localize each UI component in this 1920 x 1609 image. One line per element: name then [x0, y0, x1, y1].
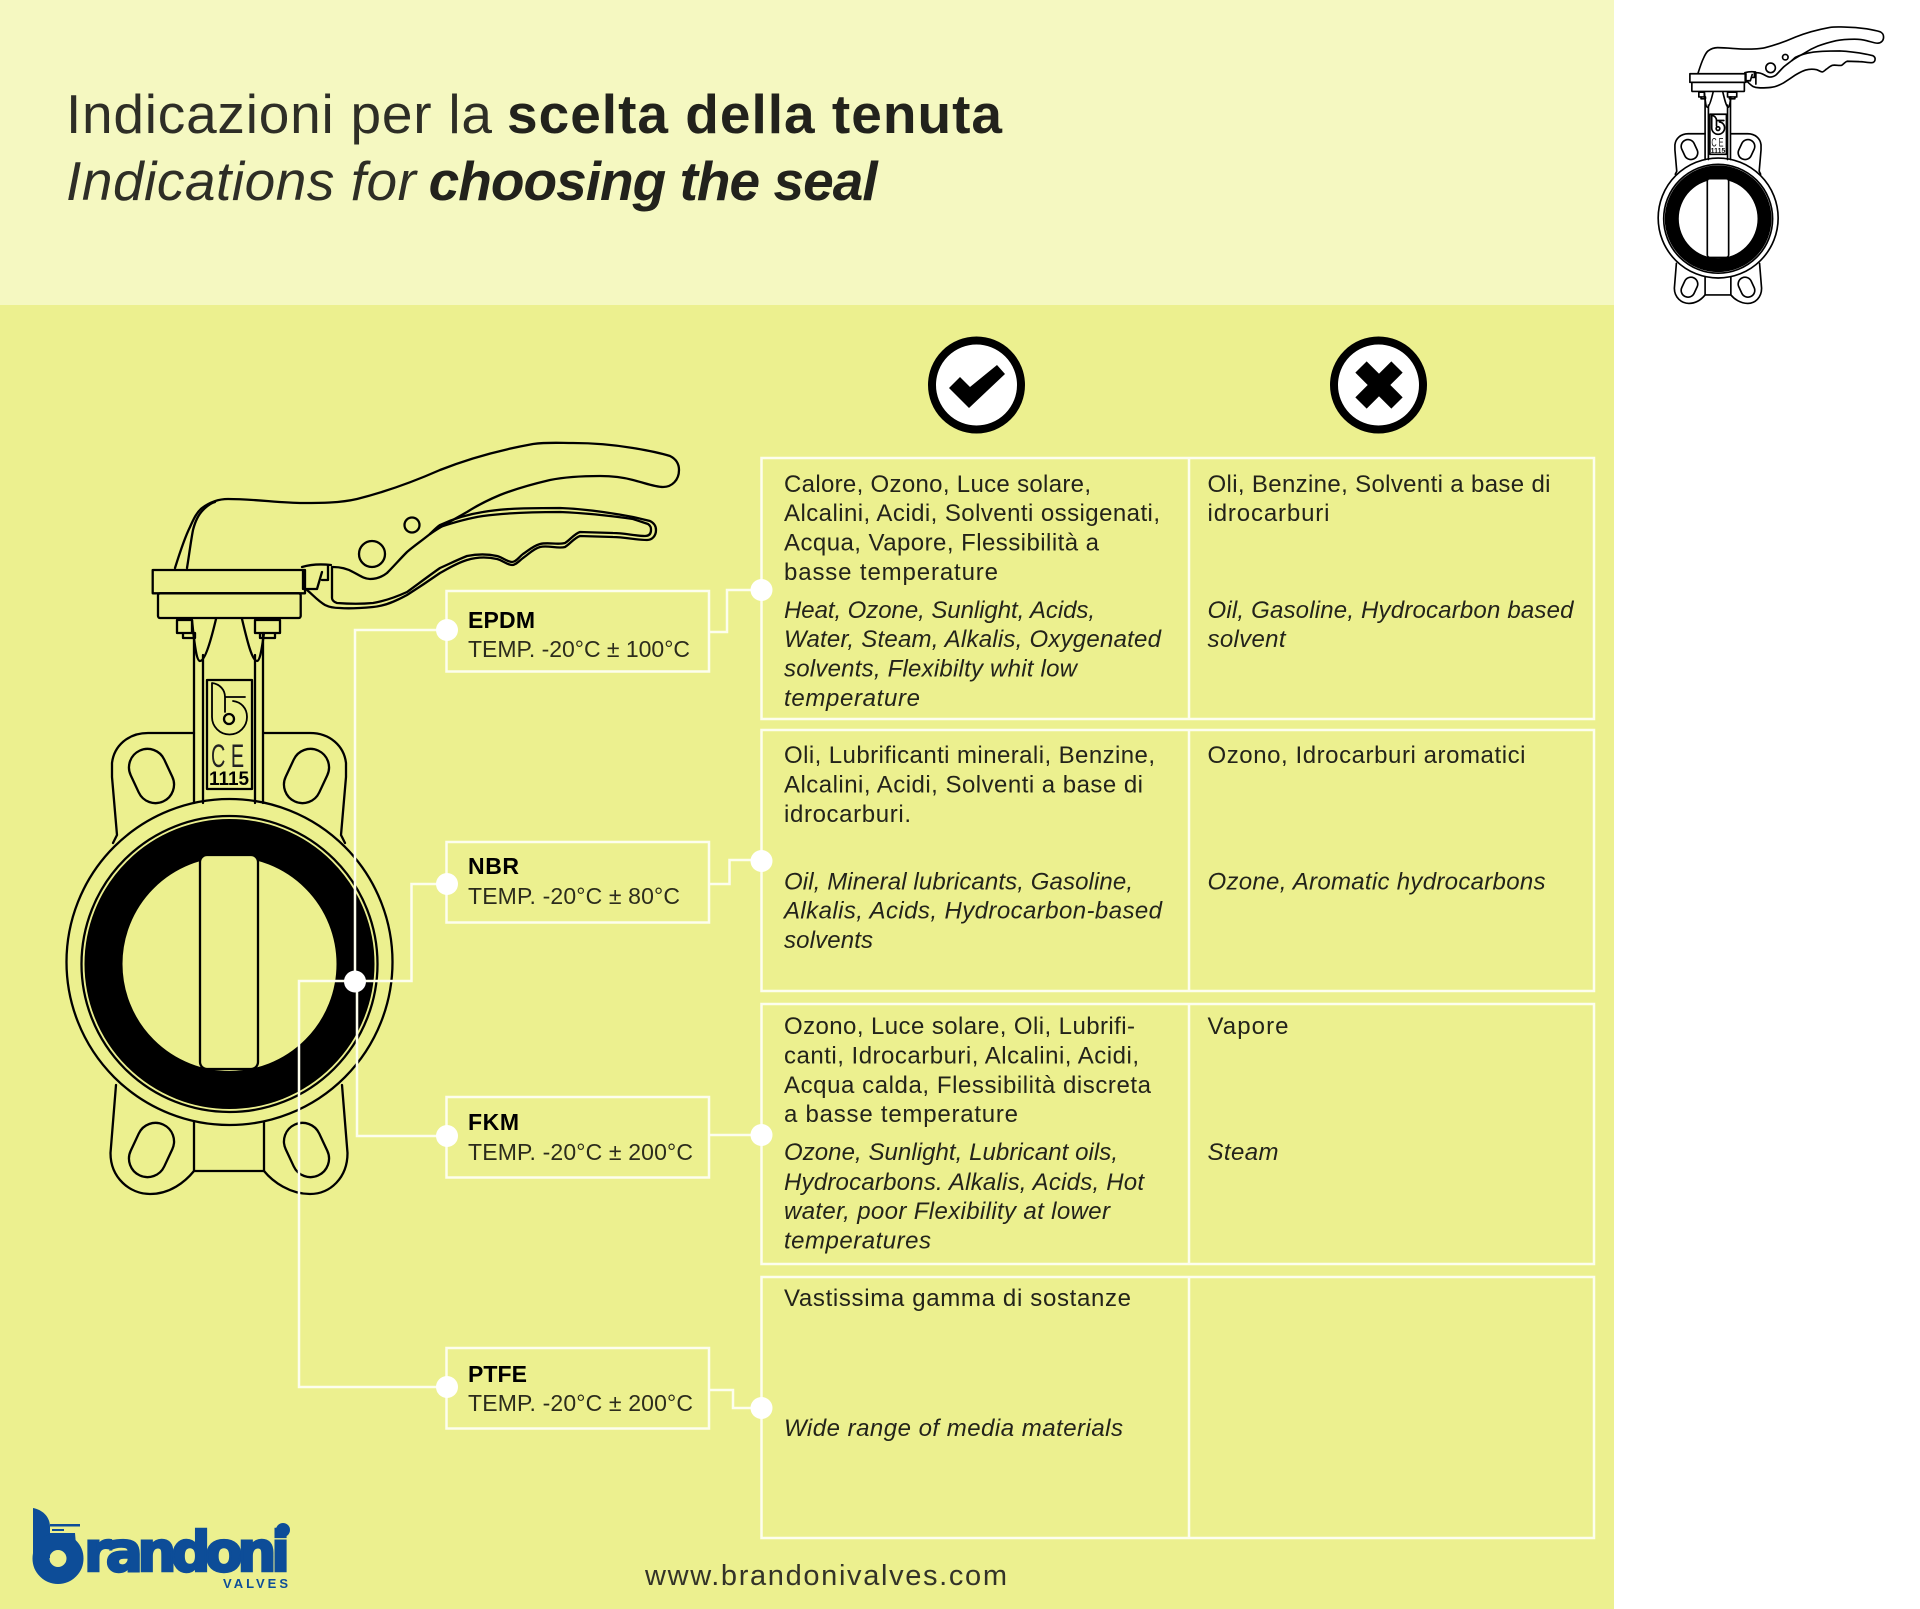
table row: EPDM: solvent: [1208, 626, 1287, 653]
logo: brandoni valves: [33, 1508, 290, 1591]
table row: NBR: Alcalini, Acidi, Solventi a base di: [784, 772, 1143, 798]
connector lines: material labels to table: [709, 590, 761, 1408]
table row: NBR: idrocarburi.: [784, 801, 911, 828]
table row: EPDM: solvents, Flexibilty whit low: [784, 656, 1079, 682]
table row: FKM: Ozono, Luce solare, Oli, Lubrifi-: [784, 1013, 1135, 1040]
title: Indicazioni per la: [66, 83, 492, 145]
label: NBR: NBR: [468, 853, 519, 879]
table row: FKM: water, poor Flexibility at lower: [784, 1198, 1111, 1225]
main background panel: [0, 305, 1614, 1609]
table row: FKM: Acqua calda, Flessibilità discreta: [784, 1072, 1152, 1099]
label: PTFE: PTFE: [468, 1361, 527, 1387]
table row: FKM: temperatures: [784, 1228, 931, 1254]
label: EPDM: TEMP. -20°C ± 100°C: [468, 636, 690, 662]
table row: EPDM: [750, 458, 1594, 719]
label: PTFE: [436, 1348, 709, 1428]
table row: NBR: solvents: [784, 927, 873, 954]
table row: FKM: a basse temperature: [784, 1101, 1018, 1128]
table row: EPDM: Heat, Ozone, Sunlight, Acids,: [784, 597, 1095, 624]
table row: EPDM: basse temperature: [784, 559, 998, 586]
large valve drawing: [66, 443, 679, 1194]
lower lugs: [110, 1085, 348, 1194]
upper lugs: [112, 733, 346, 843]
title: Indications for: [66, 150, 419, 212]
label: EPDM: [436, 591, 709, 672]
table row: EPDM: Calore, Ozono, Luce solare,: [784, 471, 1091, 498]
thumbnail valve drawing: CE: [1711, 137, 1724, 150]
table row: NBR: Ozono, Idrocarburi aromatici: [1208, 742, 1526, 769]
large valve drawing: 1115: [209, 769, 249, 790]
table row: NBR: Oli, Lubrificanti minerali, Benzine,: [784, 742, 1155, 769]
label: FKM: [436, 1097, 709, 1178]
connector lines: valve to material labels: [299, 630, 447, 1387]
icon: cross mark: [1334, 340, 1423, 430]
table row: FKM: canti, Idrocarburi, Alcalini, Acidi,: [784, 1042, 1139, 1070]
label: EPDM: EPDM: [468, 607, 535, 633]
table row: NBR: Oil, Mineral lubricants, Gasoline,: [784, 868, 1133, 896]
table row: FKM: Hydrocarbons. Alkalis, Acids, Hot: [784, 1169, 1145, 1196]
logo: brandoni valves: VALVES: [223, 1576, 288, 1591]
label: FKM: FKM: [468, 1109, 519, 1135]
table row: FKM: Vapore: [1208, 1013, 1288, 1040]
label: FKM: TEMP. -20°C ± 200°C: [468, 1139, 693, 1165]
thumbnail valve drawing: 1115: [1711, 148, 1725, 155]
large valve drawing: CE: [211, 738, 244, 774]
table row: EPDM: temperature: [784, 685, 920, 712]
table row: EPDM: Water, Steam, Alkalis, Oxygenated: [784, 626, 1162, 653]
header band: [0, 0, 1614, 305]
label: NBR: TEMP. -20°C ± 80°C: [468, 883, 680, 909]
table row: NBR: Ozone, Aromatic hydrocarbons: [1208, 868, 1546, 896]
thumbnail valve drawing: [1658, 27, 1884, 303]
table row: PTFE: [750, 1277, 1594, 1538]
logo: brandoni valves: randoni: [84, 1520, 290, 1584]
table row: PTFE: Wide range of media materials: [784, 1415, 1123, 1442]
icon: check mark: [932, 340, 1021, 430]
table row: FKM: Steam: [1208, 1139, 1278, 1166]
table row: EPDM: idrocarburi: [1208, 500, 1330, 527]
title: choosing the seal: [429, 150, 879, 212]
table row: FKM: [750, 1004, 1594, 1264]
table row: EPDM: Oli, Benzine, Solventi a base di: [1208, 471, 1550, 498]
table row: NBR: [750, 730, 1594, 991]
title: [66, 83, 1002, 212]
table row: EPDM: Oil, Gasoline, Hydrocarbon based: [1208, 597, 1574, 624]
title: scelta della tenuta: [507, 83, 1002, 145]
website url: www.brandonivalves.com: [644, 1560, 1007, 1592]
table row: NBR: Alkalis, Acids, Hydrocarbon-based: [782, 898, 1163, 924]
label: NBR: [436, 842, 709, 922]
label: PTFE: TEMP. -20°C ± 200°C: [468, 1390, 693, 1416]
table row: EPDM: Alcalini, Acidi, Solventi ossigenati,: [784, 500, 1160, 527]
table row: EPDM: Acqua, Vapore, Flessibilità a: [784, 530, 1100, 556]
table row: FKM: Ozone, Sunlight, Lubricant oils,: [784, 1139, 1118, 1166]
table row: PTFE: Vastissima gamma di sostanze: [784, 1285, 1131, 1312]
